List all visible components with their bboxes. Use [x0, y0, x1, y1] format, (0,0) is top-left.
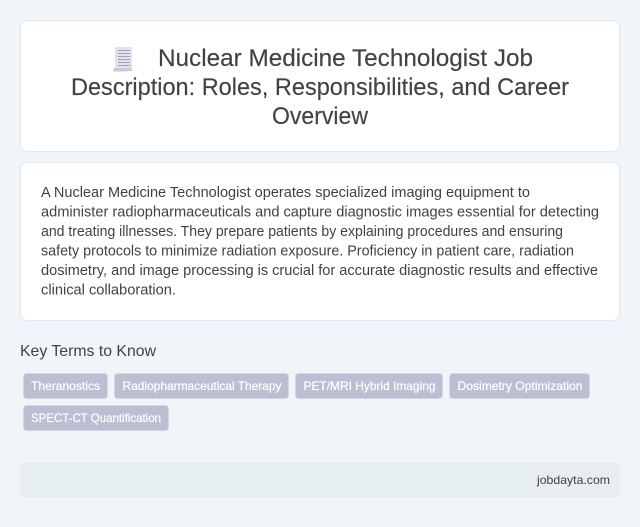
tag: SPECT-CT Quantification [24, 406, 168, 430]
tag: Radiopharmaceutical Therapy: Radiopharmaceutical Therapy [122, 379, 282, 393]
text block: description: clinical collaboration. [41, 282, 176, 298]
panel: title card [20, 20, 620, 152]
footer bar [20, 463, 620, 497]
text block: description: A Nuclear Medicine Technologist operates specialized imaging equipment to [41, 185, 530, 201]
tag: Dosimetry Optimization [450, 374, 590, 398]
text block: description: dosimetry, and image processing is crucial for accurate diagnostic results and effective [41, 263, 598, 279]
tag: Radiopharmaceutical Therapy [114, 374, 288, 398]
icon: document scroll [113, 47, 132, 72]
text block: description [41, 185, 599, 298]
tag: Theranostics [24, 374, 108, 398]
tag: Theranostics: Theranostics [31, 379, 100, 393]
heading: title: Nuclear Medicine Technologist Job [158, 45, 533, 72]
text block: description: and treating illnesses. They prepare patients by explaining procedures and ensuring [41, 224, 563, 240]
text block: description: administer radiopharmaceuticals and capture diagnostic images essential for detecting [41, 204, 599, 220]
tag: SPECT-CT Quantification: SPECT-CT Quantification [31, 411, 161, 425]
tag: PET/MRI Hybrid Imaging [296, 374, 442, 398]
panel: description card [20, 162, 620, 320]
text: source: jobdayta.com [536, 473, 610, 487]
text block: description: safety protocols to minimize radiation exposure. Proficiency in patient care, radiation [41, 244, 574, 260]
heading: title [71, 45, 569, 130]
heading: title: Overview [272, 103, 368, 130]
tag: Dosimetry Optimization: Dosimetry Optimization [458, 379, 582, 393]
heading: key terms: Key Terms to Know [20, 343, 156, 360]
tag: PET/MRI Hybrid Imaging: PET/MRI Hybrid Imaging [304, 379, 436, 393]
heading: title: Description: Roles, Responsibilities, and Career [71, 74, 569, 101]
